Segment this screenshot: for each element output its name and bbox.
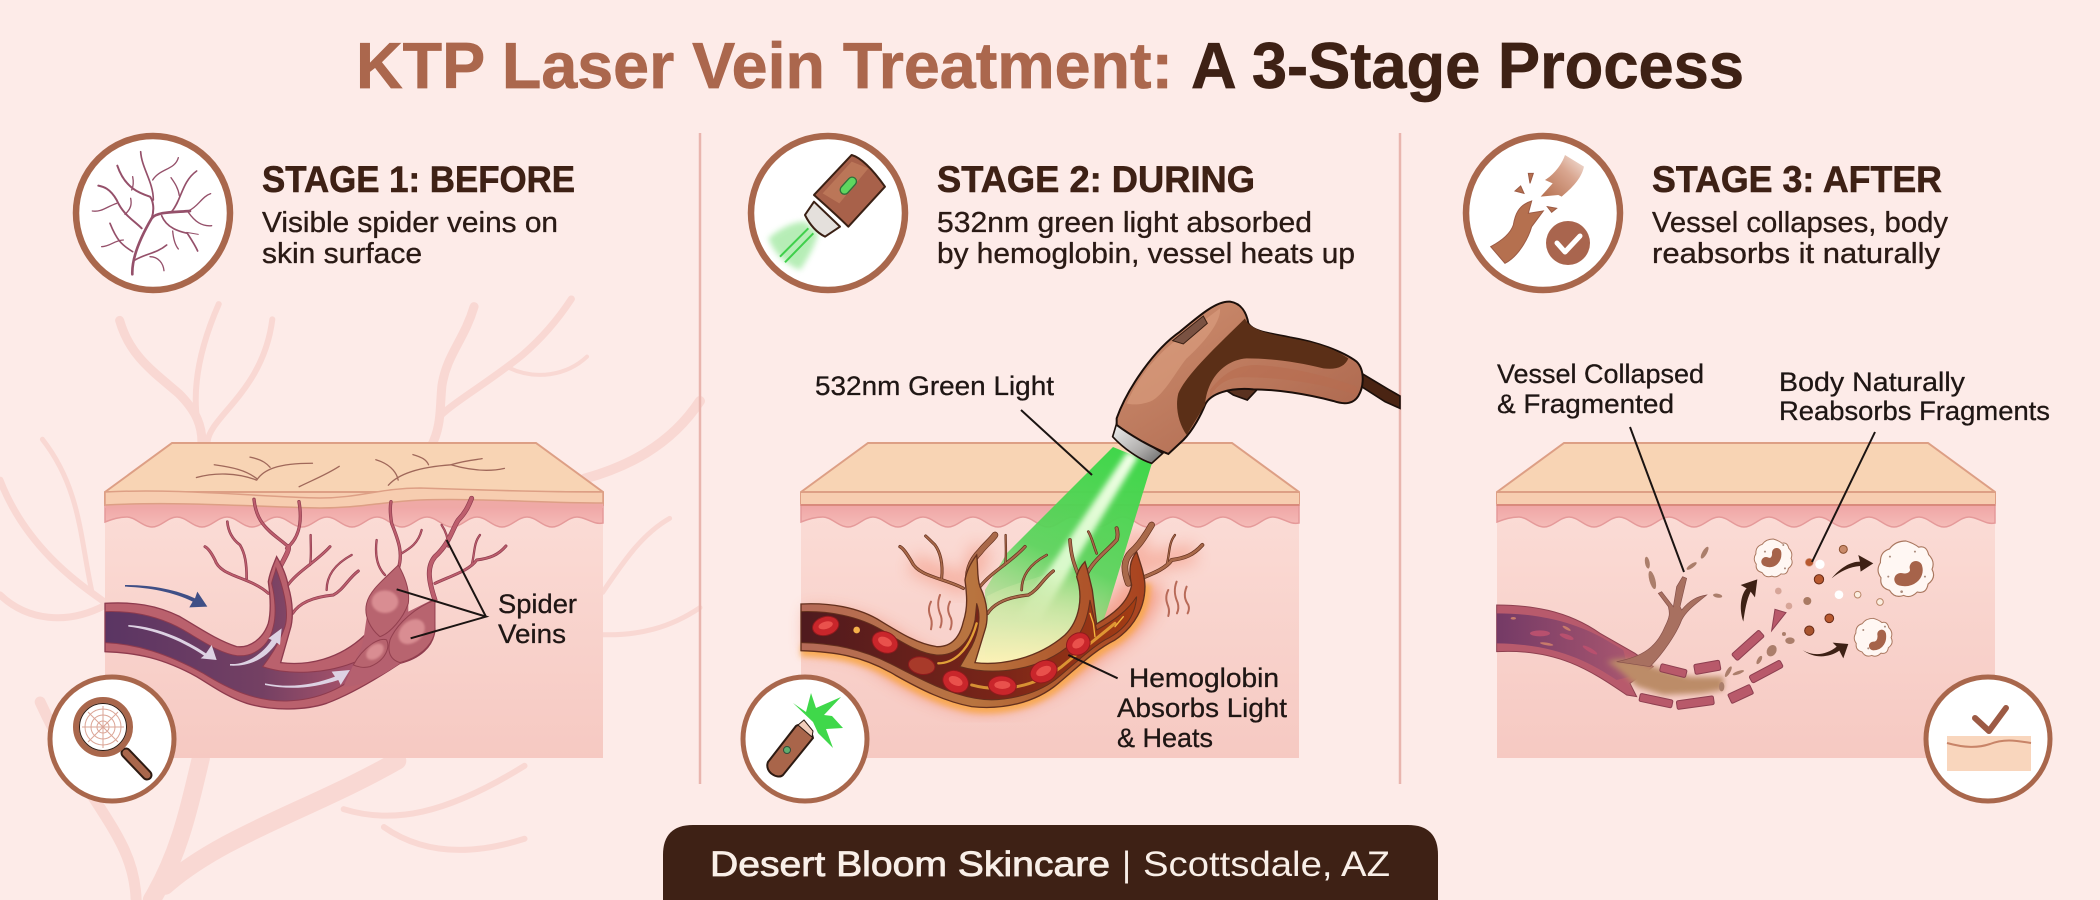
label: hemoglobin: Hemoglobin [1129, 663, 1279, 693]
leader: 532nm [1021, 410, 1092, 475]
heading: stage 3: STAGE 3: AFTER [1652, 159, 1942, 200]
leader lines [397, 540, 486, 638]
surface veins [196, 455, 504, 487]
dividers [700, 133, 1400, 784]
heading: stage 1: STAGE 1: BEFORE [262, 159, 575, 200]
small shards [1644, 546, 1795, 691]
title [356, 29, 1744, 102]
brown mass [1607, 659, 1723, 695]
vein diagram 1 [105, 498, 506, 709]
icon: spider veins circle [76, 136, 230, 290]
skin block 3 [1497, 443, 1995, 758]
label: body reabsorbs: Reabsorbs Fragments [1779, 396, 2050, 426]
branch veins [900, 525, 1202, 613]
collapsed vessel diagram [1497, 539, 1934, 710]
skin block 1 [105, 443, 603, 758]
footer: Scottsdale, AZ [1143, 845, 1390, 884]
description: stage 3: Vessel collapses, body [1652, 207, 1948, 239]
remaining vessel [1497, 605, 1653, 697]
panel: stage 2 during [743, 136, 1400, 801]
title: A 3-Stage Process [1191, 29, 1744, 102]
green beam [985, 447, 1152, 660]
heat glow [805, 533, 1195, 690]
icon: laser pen burst [743, 677, 867, 801]
orange edge glow [801, 583, 1145, 707]
absorbed particles [1775, 545, 1883, 635]
description: stage 1 [262, 207, 558, 270]
label: body reabsorbs [1779, 367, 2050, 426]
yellow heat streaks [938, 613, 1123, 688]
handpiece [1113, 302, 1400, 463]
label: vessel collapsed: Vessel Collapsed [1497, 359, 1704, 389]
panel: stage 1 before [50, 136, 603, 801]
label: spider veins [498, 589, 577, 649]
label: hemoglobin [1117, 663, 1288, 753]
decorative vein tree background [0, 299, 700, 900]
heading: stage 2: STAGE 2: DURING [937, 159, 1255, 200]
vessel fragments [1639, 609, 1786, 710]
macrophage cells [1754, 539, 1934, 656]
heat squiggles [929, 582, 1189, 629]
blue arrow [125, 585, 207, 607]
leader lines [1630, 427, 1875, 572]
label: hemoglobin: Absorbs Light [1117, 693, 1288, 723]
reabsorption arrows [1741, 555, 1873, 658]
flow arrows [128, 625, 350, 688]
main vessel [801, 552, 1145, 707]
footer: Desert Bloom Skincare [710, 845, 1110, 884]
label: hemoglobin: & Heats [1117, 723, 1213, 753]
swollen veins [343, 565, 435, 687]
title: KTP Laser Vein Treatment: [356, 29, 1173, 102]
red blood cells [810, 614, 1095, 697]
lit tissue [975, 570, 1080, 663]
label: vessel collapsed [1497, 359, 1704, 419]
description: stage 1: skin surface [262, 238, 422, 270]
icon: healed skin check [1926, 677, 2050, 801]
leader [1068, 655, 1118, 678]
heated vein diagram [801, 525, 1202, 707]
icon: magnifier [50, 677, 174, 801]
icon: laser tip circle [751, 136, 905, 290]
description: stage 2: 532nm green light absorbed [937, 207, 1312, 239]
description: stage 2 [937, 207, 1355, 270]
skin block 2 [801, 443, 1299, 758]
footer [663, 825, 1438, 900]
description: stage 3: reabsorbs it naturally [1652, 238, 1941, 270]
branch veins [205, 498, 506, 613]
label: 532nm green light: 532nm Green Light [815, 371, 1055, 401]
icon: fragmenting vessel [1466, 136, 1620, 290]
main vessel [105, 557, 435, 709]
fragmented branch [1617, 577, 1707, 667]
description: stage 3 [1652, 207, 1948, 270]
label: spider veins: Veins [498, 619, 566, 649]
description: stage 1: Visible spider veins on [262, 207, 558, 239]
description: stage 2: by hemoglobin, vessel heats up [937, 238, 1355, 270]
label: body reabsorbs: Body Naturally [1779, 367, 1966, 397]
label: spider veins: Spider [498, 589, 577, 619]
label: vessel collapsed: & Fragmented [1497, 389, 1674, 419]
footer: | [1122, 845, 1131, 884]
panel: stage 3 after [1466, 136, 2050, 801]
